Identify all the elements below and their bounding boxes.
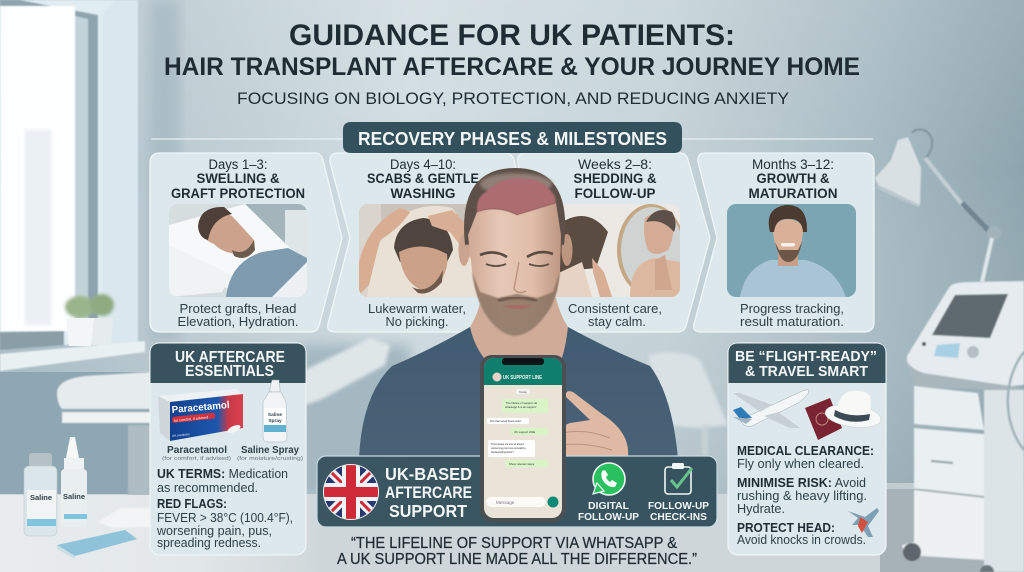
section heading badge	[343, 122, 682, 153]
support label: AFTERCARE	[385, 484, 472, 502]
chair behind man	[648, 352, 728, 457]
heading: Days 4–10:	[390, 157, 456, 172]
UK terms text: UK TERMS: Medication	[157, 467, 288, 481]
check-ins label: CHECK-INS	[650, 512, 707, 523]
UK terms text: as recommended.	[157, 481, 258, 495]
product labels: (for moisture/crusting)	[237, 456, 303, 462]
neck	[470, 298, 568, 358]
heading: SHEDDING &	[574, 171, 657, 186]
chat bubbles: Tips please via sound asked	[491, 442, 524, 446]
chat header	[484, 358, 562, 385]
digital follow-up label	[578, 501, 639, 523]
product labels	[162, 445, 303, 462]
exam bed	[57, 338, 390, 497]
heading	[171, 157, 305, 201]
ears	[458, 234, 470, 266]
icon: paracetamol box	[158, 389, 243, 441]
face	[468, 203, 561, 336]
support bar	[317, 456, 717, 527]
caption	[740, 302, 844, 329]
heading	[574, 157, 657, 201]
panel header: ESSENTIALS	[185, 363, 274, 380]
heading: MATURATION	[748, 186, 838, 201]
heading	[367, 157, 479, 201]
icon: WhatsApp	[593, 463, 625, 495]
message input	[486, 496, 558, 508]
table with saline bottles: Saline	[63, 492, 85, 501]
chat bubbles: Show relevant steps	[509, 462, 535, 466]
minimise risk text: Hydrate.	[737, 502, 785, 516]
red flags text: RED FLAGS:	[157, 497, 227, 511]
icon: paracetamol box: Paracetamol	[171, 400, 230, 416]
hand holding phone	[559, 391, 628, 456]
product labels: (for comfort, if advised)	[162, 456, 231, 462]
minimise risk text	[737, 476, 867, 516]
check-ins label: FOLLOW-UP	[648, 501, 709, 512]
shirt	[359, 327, 678, 458]
UK terms text	[157, 467, 288, 495]
caption: Protect grafts, Head	[180, 302, 297, 316]
digital follow-up label: FOLLOW-UP	[578, 512, 639, 523]
section rule left	[151, 138, 345, 140]
title: FOCUSING ON BIOLOGY, PROTECTION, AND REDUCING ANXIETY	[237, 89, 789, 108]
heading: SCABS & GENTLE	[367, 171, 479, 186]
panel header	[150, 344, 306, 383]
heading: Weeks 2–8:	[578, 157, 652, 172]
photo: patient resting	[169, 204, 307, 297]
window	[0, 0, 145, 371]
stubble head	[464, 168, 565, 245]
panel: months 3-12	[694, 153, 874, 332]
chat bubbles: biodegrading/tests?	[491, 450, 514, 454]
heading: Months 3–12:	[752, 157, 834, 172]
heading: FOLLOW-UP	[574, 186, 656, 201]
icon: hat	[824, 391, 882, 431]
icon: passport	[805, 398, 842, 440]
clearance text: MEDICAL CLEARANCE:	[737, 444, 874, 458]
icon: saline spray: Saline	[268, 412, 282, 418]
panel header: & TRAVEL SMART	[745, 363, 868, 380]
check-ins label	[648, 501, 709, 523]
panel header: UK AFTERCARE	[175, 349, 285, 366]
beard	[472, 272, 560, 336]
clearance text: Fly only when cleared.	[737, 457, 864, 471]
panel: flight-ready	[728, 343, 886, 555]
photo: full growth	[727, 204, 856, 297]
title: GUIDANCE FOR UK PATIENTS:	[289, 19, 735, 52]
caption: Consistent care,	[568, 302, 662, 316]
title: HAIR TRANSPLANT AFTERCARE & YOUR JOURNEY HOME	[164, 53, 860, 81]
caption: stay calm.	[588, 315, 646, 329]
caption: result maturation.	[740, 315, 844, 329]
phone	[480, 355, 566, 522]
support label	[385, 464, 472, 521]
heading	[748, 157, 838, 201]
testimonial quote	[337, 535, 697, 568]
protect head text: PROTECT HEAD:	[737, 521, 835, 535]
panel header: BE “FLIGHT-READY”	[735, 348, 877, 365]
panel: days 1-3	[150, 153, 342, 332]
red flags text: worsening pain, pus,	[156, 524, 272, 538]
minimise risk text: rushing & heavy lifting.	[737, 489, 867, 503]
support label: SUPPORT	[389, 501, 467, 521]
protect head text	[737, 521, 866, 547]
chat bubbles: “The lifeline of support via	[505, 401, 537, 405]
nose	[514, 262, 526, 293]
panel: days 4-10	[328, 153, 532, 332]
mustache	[498, 298, 537, 301]
graft area	[477, 178, 556, 215]
lamp	[875, 129, 1001, 282]
caption	[368, 302, 466, 329]
heading: GROWTH &	[756, 171, 830, 186]
heading: SWELLING &	[196, 171, 280, 186]
icon: paracetamol box: UK medicine	[172, 432, 190, 438]
chat bubbles	[487, 389, 548, 467]
clearance text	[737, 444, 874, 471]
icon: clipboard check	[665, 463, 692, 494]
support label: UK-BASED	[385, 464, 472, 484]
photo: shedding and mirror	[555, 204, 680, 297]
chat bubbles: worsening pain pus spreading	[491, 446, 526, 450]
protect head text: Avoid knocks in crowds.	[737, 533, 866, 547]
chat bubbles: UK support LINE	[514, 430, 535, 434]
testimonial quote: “THE LIFELINE OF SUPPORT VIA WHATSAPP &	[351, 535, 678, 552]
heading: Days 1–3:	[208, 157, 268, 172]
chat bubbles: Today	[519, 390, 527, 394]
photo: gentle washing	[359, 204, 478, 297]
red flags text: spreading redness.	[157, 536, 261, 550]
plants on sill	[65, 294, 114, 346]
heading: WASHING	[390, 186, 456, 201]
section rule right	[680, 138, 873, 140]
panel header	[728, 344, 886, 383]
lowered eyes	[486, 264, 506, 266]
icon: airplane	[733, 390, 809, 428]
section heading badge: RECOVERY PHASES & MILESTONES	[358, 128, 667, 149]
testimonial quote: A UK SUPPORT LINE MADE ALL THE DIFFERENCE.”	[337, 551, 697, 568]
caption: Elevation, Hydration.	[178, 315, 298, 329]
message input: Message	[496, 500, 515, 505]
minimise risk text: MINIMISE RISK: Avoid	[737, 476, 866, 490]
caption	[568, 302, 662, 329]
panel: weeks 2-8	[512, 153, 710, 332]
table with saline bottles: Saline	[30, 493, 52, 502]
caption: Lukewarm water,	[368, 302, 466, 316]
red flags text: FEVER > 38°C (100.4°F),	[157, 511, 293, 525]
caption	[178, 302, 298, 329]
red flags text	[156, 497, 293, 550]
caption: Progress tracking,	[740, 302, 844, 316]
heading: GRAFT PROTECTION	[171, 186, 305, 201]
title	[164, 19, 860, 108]
icon: small plane	[848, 508, 879, 537]
mouth	[503, 305, 532, 309]
digital follow-up label: DIGITAL	[588, 501, 629, 512]
icon: UK flag	[323, 464, 379, 520]
central man	[359, 168, 678, 458]
brows	[480, 252, 507, 257]
icon: saline spray	[263, 380, 287, 442]
table with saline bottles	[0, 437, 320, 572]
panel: UK aftercare essentials	[150, 343, 306, 555]
scalp above grafts	[480, 173, 552, 195]
icon: saline spray: Spray	[268, 418, 282, 424]
chat bubbles: Not that usual fixed relief	[490, 419, 521, 423]
chat bubbles: whatsapp & a uk support”	[505, 405, 537, 409]
chat header: UK SUPPORT LINE	[503, 375, 543, 381]
icon: paracetamol box: for comfort, if advised	[174, 415, 208, 423]
product labels: Saline Spray	[241, 445, 299, 456]
medical device	[902, 281, 1024, 572]
caption: No picking.	[386, 315, 448, 329]
product labels: Paracetamol	[167, 445, 227, 456]
